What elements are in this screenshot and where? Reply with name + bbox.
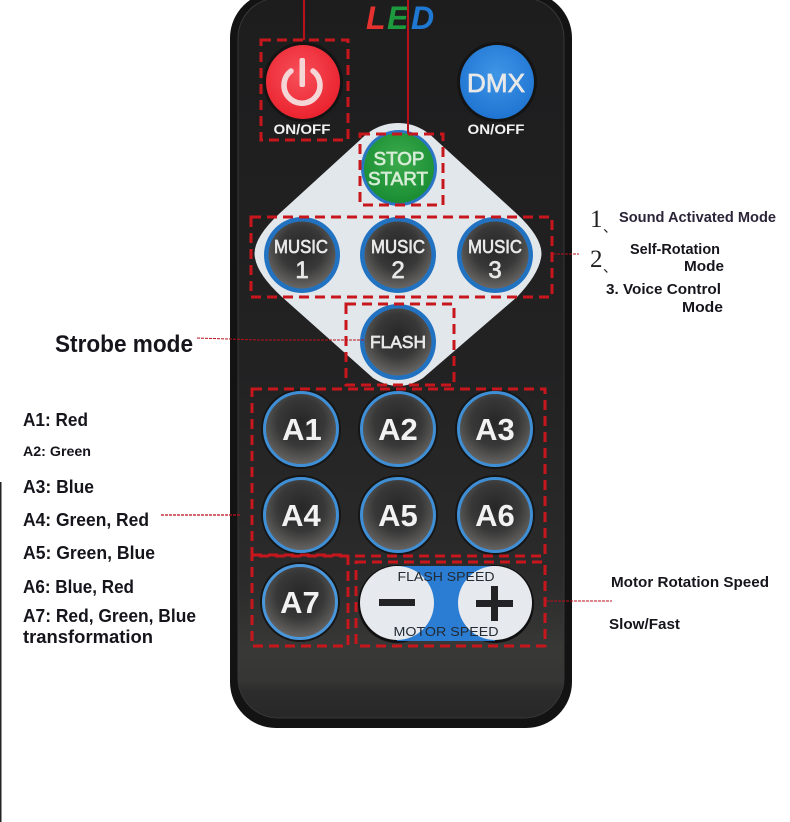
- left colour legend: [23, 410, 196, 647]
- music 1 button: [264, 217, 340, 293]
- A5 button: [358, 475, 438, 555]
- music 3 button: [457, 217, 533, 293]
- motor speed notes: Slow/Fast: [609, 617, 680, 633]
- right mode list: Self-Rotation: [630, 242, 720, 258]
- left edge line: [0, 482, 2, 822]
- right mode list: 、: [603, 217, 617, 237]
- left colour legend: A7: Red, Green, Blue: [23, 606, 196, 626]
- LED logo: E: [387, 0, 410, 36]
- A4 button: A4: [281, 498, 322, 533]
- right mode list: Sound Activated Mode: [619, 210, 776, 226]
- A6 button: [455, 475, 535, 555]
- right mode list: 、: [603, 257, 617, 277]
- dashed highlight boxes: [251, 40, 552, 646]
- power label: ON/OFF: [274, 121, 331, 137]
- right mode list: [590, 206, 776, 316]
- motor speed label: MOTOR SPEED: [394, 624, 498, 639]
- motor speed notes: [609, 575, 769, 633]
- music 3 button: 3: [488, 257, 502, 284]
- A7 button: [260, 562, 340, 642]
- right mode list: Mode: [684, 259, 724, 275]
- right mode list: 2: [590, 246, 602, 273]
- speed control: [358, 565, 534, 643]
- motor speed notes: Motor Rotation Speed: [611, 575, 769, 591]
- plus icon: [476, 586, 513, 621]
- left colour legend: A4: Green, Red: [23, 510, 149, 530]
- left colour legend: A2: Green: [23, 443, 91, 459]
- flash button: FLASH: [370, 332, 426, 352]
- A2 button: A2: [378, 412, 418, 447]
- power button: [263, 42, 343, 122]
- DMX button: DMX: [467, 68, 525, 98]
- stop start button: [361, 130, 437, 206]
- A2 button: [358, 389, 438, 469]
- right mode list: 1: [590, 206, 602, 233]
- A6 button: A6: [475, 498, 515, 533]
- right mode list: 3. Voice Control: [606, 282, 721, 298]
- minus icon: [379, 599, 415, 606]
- left colour legend: A3: Blue: [23, 477, 94, 497]
- LED logo: D: [411, 0, 434, 36]
- A3 button: A3: [475, 412, 515, 447]
- flash button: [360, 304, 436, 380]
- music 1 button: 1: [295, 257, 309, 284]
- A4 button: [261, 475, 341, 555]
- left colour legend: A6: Blue, Red: [23, 577, 134, 597]
- remote control body: [230, 0, 572, 728]
- white button panel: [255, 123, 541, 386]
- left colour legend: A5: Green, Blue: [23, 543, 155, 563]
- DMX label: ON/OFF: [468, 121, 525, 137]
- music 3 button: MUSIC: [468, 237, 522, 257]
- stop start button: START: [368, 168, 428, 189]
- music 2 button: MUSIC: [371, 237, 425, 257]
- LED logo: L: [366, 0, 386, 36]
- music 2 button: 2: [391, 257, 405, 284]
- flash speed label: FLASH SPEED: [398, 569, 494, 584]
- left colour legend: transformation: [23, 627, 153, 647]
- label: strobe mode: Strobe mode: [55, 331, 193, 358]
- A5 button: A5: [378, 498, 418, 533]
- connector lines: [161, 0, 612, 601]
- right mode list: Mode: [682, 300, 723, 316]
- music 1 button: MUSIC: [274, 237, 328, 257]
- A7 button: A7: [280, 585, 320, 620]
- DMX button: [457, 42, 537, 122]
- A1 button: [261, 389, 341, 469]
- LED logo: [366, 0, 434, 36]
- stop start button: STOP: [374, 148, 424, 169]
- left colour legend: A1: Red: [23, 410, 88, 430]
- music 2 button: [360, 217, 436, 293]
- A1 button: A1: [282, 412, 322, 447]
- A3 button: [455, 389, 535, 469]
